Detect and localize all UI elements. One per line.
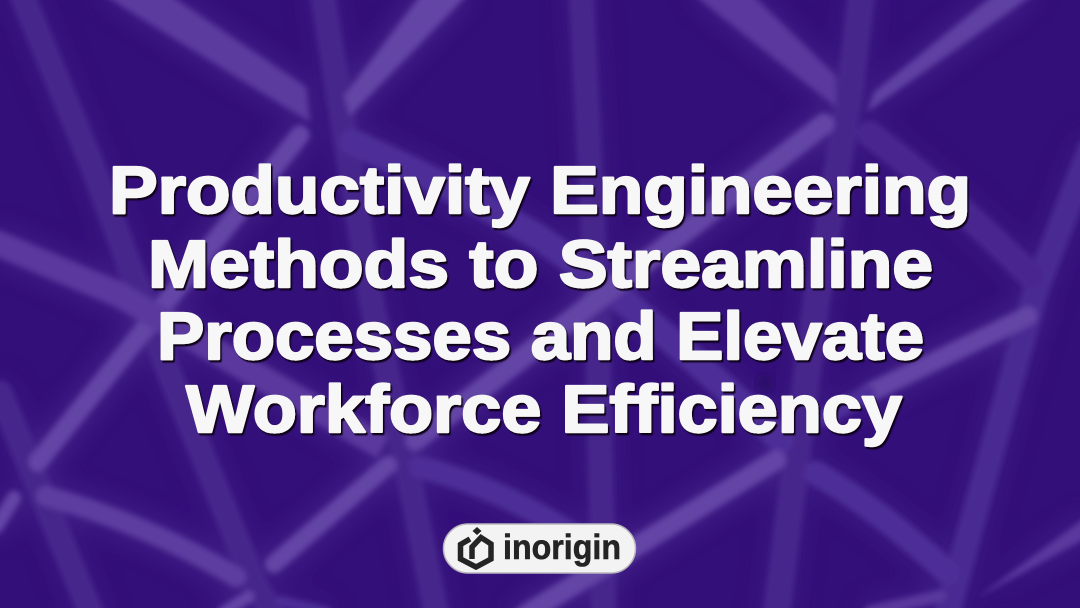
bolt detail bbox=[756, 374, 774, 392]
title: Productivity Engineering bbox=[109, 153, 971, 228]
title: Processes and Elevate bbox=[157, 299, 924, 374]
title bbox=[109, 153, 971, 447]
title: Methods to Streamline bbox=[148, 227, 933, 302]
title: Workforce Efficiency bbox=[186, 372, 902, 447]
logo wordmark: inorigin bbox=[503, 528, 621, 567]
icon: inorigin hexagon mark bbox=[460, 527, 491, 567]
logo pill bbox=[444, 524, 636, 573]
